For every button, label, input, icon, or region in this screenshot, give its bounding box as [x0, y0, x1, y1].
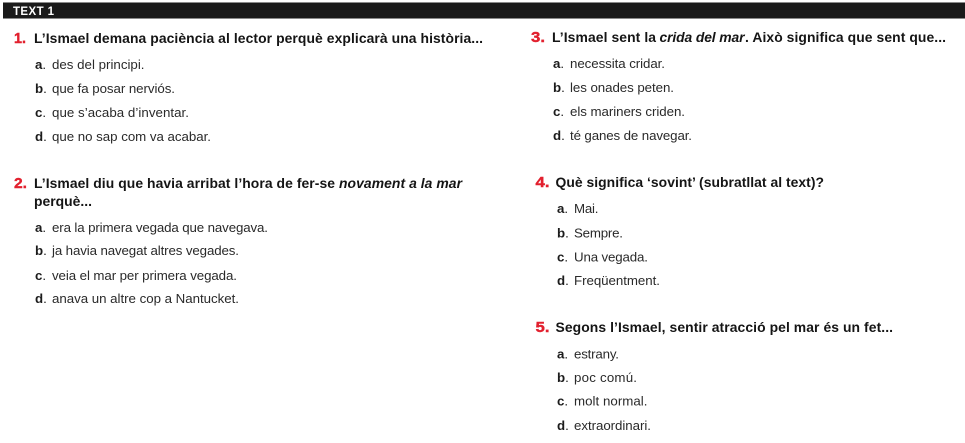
question 2: [14, 175, 464, 306]
option 3d: d.: [553, 128, 565, 143]
option 2c: c.: [35, 268, 46, 283]
question 3 text: crida del mar: [660, 29, 746, 45]
option 4b: Sempre.: [574, 226, 623, 240]
option 2d: anava un altre cop a Nantucket.: [52, 291, 239, 306]
question 4 text: Què significa ‘sovint’ (subratllat al text)?: [556, 174, 824, 190]
option 1c: que s’acaba d’inventar.: [52, 105, 189, 120]
number 2: 2.: [14, 175, 27, 192]
option 2a: era la primera vegada que navegava.: [52, 220, 268, 235]
question 2 text: L’Ismael diu que havia arribat l’hora de fer-se: [34, 175, 335, 191]
option 3b: b.: [553, 80, 565, 95]
option 3d: té ganes de navegar.: [570, 128, 692, 143]
option 4d: d.: [557, 273, 569, 288]
question 3: [531, 29, 946, 143]
question 5 text: Segons l’Ismael, sentir atracció pel mar és un fet...: [556, 319, 893, 335]
option 3c: c.: [553, 104, 564, 119]
option 4a: Mai.: [574, 201, 598, 216]
question 4: [536, 174, 824, 288]
question 3 text: L’Ismael sent la: [552, 29, 656, 45]
header bar: TEXT 1: [13, 6, 55, 18]
option 2c: veia el mar per primera vegada.: [52, 268, 237, 283]
option 1d: d.: [35, 129, 47, 144]
question 2 text: novament a la mar: [339, 175, 464, 191]
option 3a: a.: [553, 56, 564, 71]
option 5a: a.: [557, 346, 568, 362]
option 4b: b.: [557, 226, 569, 240]
option 1b: que fa posar nerviós.: [52, 81, 175, 96]
option 4a: a.: [557, 201, 568, 216]
number 5: 5.: [536, 319, 550, 336]
number 4: 4.: [536, 174, 550, 191]
question 3 text: [552, 29, 946, 45]
number 3: 3.: [531, 29, 545, 46]
option 5a: estrany.: [574, 346, 619, 362]
option 2d: d.: [35, 291, 47, 306]
question 1: [14, 30, 483, 144]
option 2a: a.: [35, 220, 46, 235]
option 3a: necessita cridar.: [570, 56, 665, 71]
option 5b: poc comú.: [574, 370, 637, 385]
option 3b: les onades peten.: [570, 80, 674, 95]
question 5: [536, 319, 893, 433]
option 1b: b.: [35, 81, 47, 96]
option 4c: Una vegada.: [574, 250, 648, 264]
option 3c: els mariners criden.: [570, 104, 685, 119]
option 5b: b.: [557, 370, 569, 385]
question 2 text: [34, 175, 464, 209]
question 2 text: perquè...: [34, 193, 92, 209]
option 5d: extraordinari.: [574, 418, 651, 433]
option 1c: c.: [35, 105, 46, 120]
header bar: [3, 2, 965, 19]
option 2b: ja havia navegat altres vegades.: [51, 243, 239, 258]
question 3 text: . Això significa que sent que...: [745, 29, 946, 45]
option 4d: Freqüentment.: [574, 273, 660, 288]
option 2b: b.: [35, 243, 47, 258]
option 5c: c.: [557, 394, 568, 408]
option 1a: des del principi.: [52, 57, 144, 72]
question 1 text: L’Ismael demana paciència al lector perquè explicarà una història...: [34, 30, 483, 46]
option 1a: a.: [35, 57, 46, 72]
option 4c: c.: [557, 250, 568, 264]
option 5d: d.: [557, 418, 569, 433]
option 5c: molt normal.: [574, 394, 648, 408]
number 1: 1.: [14, 30, 26, 47]
option 4a: [557, 201, 598, 216]
option 1d: que no sap com va acabar.: [52, 129, 211, 144]
